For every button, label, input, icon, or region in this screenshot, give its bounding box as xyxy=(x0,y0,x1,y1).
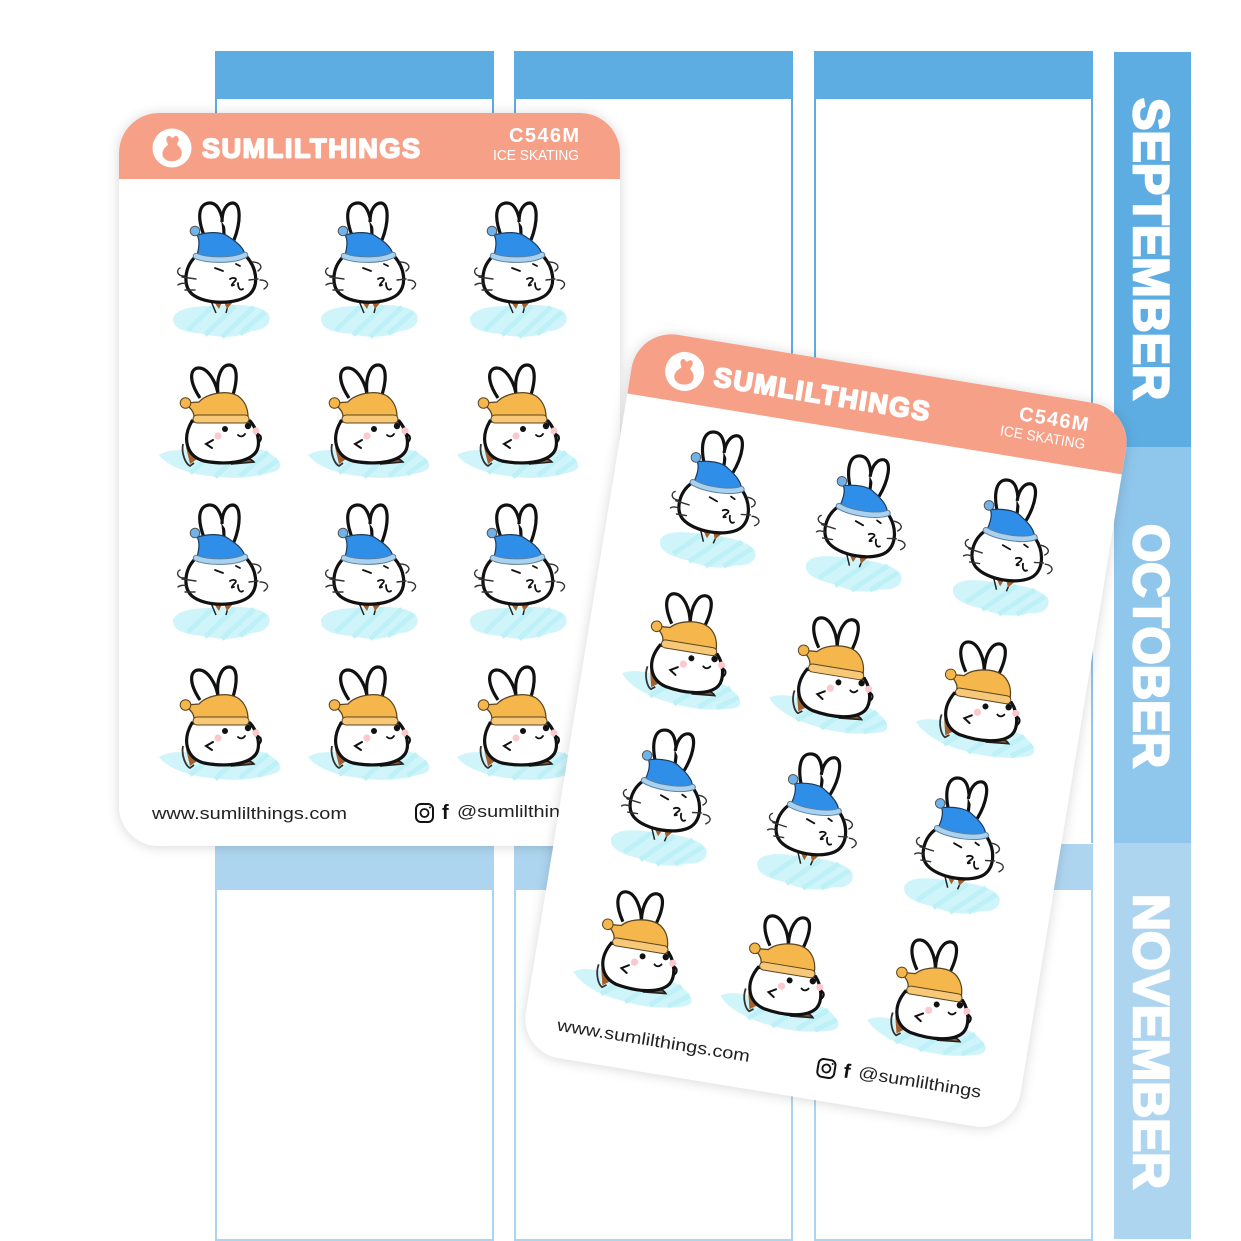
sticker: blue hat r1c2 xyxy=(321,203,418,337)
sticker: blue hat r3c3 xyxy=(470,505,567,639)
sticker: yellow hat r4c1 xyxy=(159,667,280,780)
product code: C546M xyxy=(509,125,579,147)
sticker: blue hat r1c1 xyxy=(657,426,774,574)
brand name: SUMLILTHINGS xyxy=(202,134,420,164)
social handle: @sumlilthings xyxy=(457,802,581,821)
sticker: yellow hat r4c2 xyxy=(717,907,855,1038)
logo icon xyxy=(662,349,707,394)
sheet header band xyxy=(627,328,1132,474)
sticker sheet: straight xyxy=(119,113,620,846)
sticker: blue hat r3c2 xyxy=(321,505,418,639)
brand name: SUMLILTHINGS xyxy=(712,362,932,427)
sticker: blue hat r1c2 xyxy=(803,450,920,598)
sticker: yellow hat r4c3 xyxy=(457,667,578,780)
sticker: yellow hat r2c3 xyxy=(457,365,578,478)
product name: ICE SKATING xyxy=(493,148,579,164)
product code: C546M xyxy=(1017,403,1090,436)
month label: September: SEPTEMBER xyxy=(1123,98,1179,400)
icon: facebook: f xyxy=(842,1060,852,1083)
icon: instagram xyxy=(416,804,433,822)
sticker: yellow hat r2c1 xyxy=(618,584,756,715)
sticker: yellow hat r4c3 xyxy=(864,931,1002,1062)
sticker: blue hat r3c3 xyxy=(901,772,1018,920)
website: www.sumlilthings.com xyxy=(151,804,347,823)
month sidebar xyxy=(1114,52,1191,1239)
sheet header band xyxy=(119,113,620,179)
icon: instagram xyxy=(817,1058,836,1079)
sticker: blue hat r1c3 xyxy=(470,203,567,337)
planner column 1 xyxy=(215,51,494,1240)
sticker: blue hat r3c1 xyxy=(173,505,270,639)
month label: October: OCTOBER xyxy=(1123,524,1179,768)
planner column 3 xyxy=(814,51,1093,1240)
sticker: yellow hat r4c2 xyxy=(308,667,429,780)
sticker: blue hat r3c1 xyxy=(608,724,725,872)
sticker: blue hat r1c3 xyxy=(950,474,1067,622)
month label: November: NOVEMBER xyxy=(1123,894,1179,1189)
sticker: yellow hat r2c1 xyxy=(159,365,280,478)
planner column 2 xyxy=(514,51,793,1240)
sticker: yellow hat r4c1 xyxy=(570,883,708,1013)
logo icon xyxy=(152,128,192,168)
social handle: @sumlilthings xyxy=(857,1063,983,1102)
website: www.sumlilthings.com xyxy=(555,1015,751,1066)
icon: facebook: f xyxy=(442,802,449,824)
sticker: blue hat r3c2 xyxy=(754,748,871,896)
product name: ICE SKATING xyxy=(999,423,1086,453)
sticker: yellow hat r2c2 xyxy=(308,365,429,478)
sticker: yellow hat r2c2 xyxy=(765,609,903,740)
sticker: yellow hat r2c3 xyxy=(912,633,1050,764)
sticker: blue hat r1c1 xyxy=(173,203,270,337)
sticker sheet: tilted xyxy=(520,328,1132,1133)
